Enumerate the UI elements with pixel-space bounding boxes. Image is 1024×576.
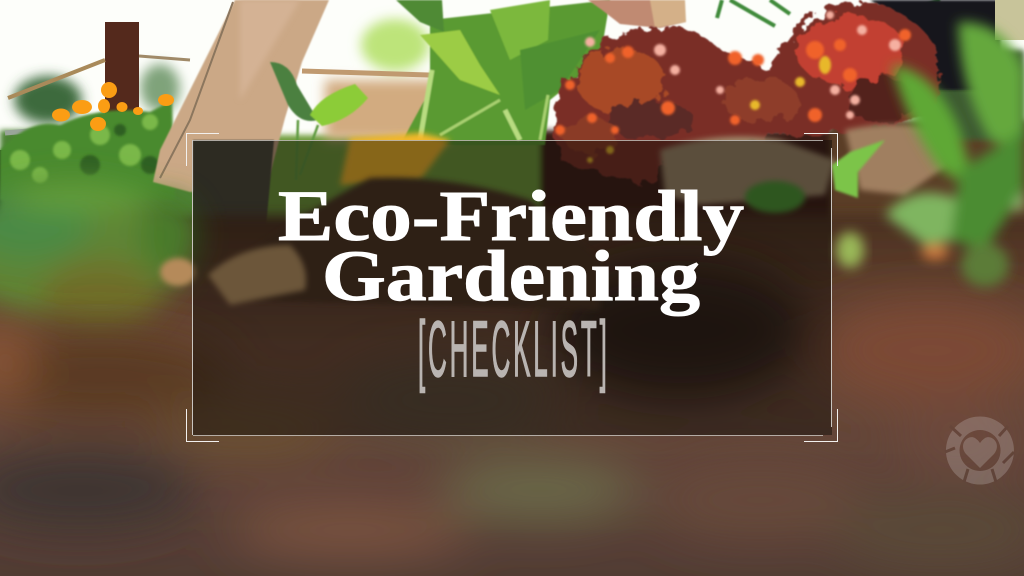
left foreground: blurred green foliage — [0, 180, 200, 331]
tall plants behind — [340, 0, 610, 185]
hand and grass at top — [588, 0, 968, 36]
sky — [0, 0, 1024, 150]
mid-height backdrop band — [0, 50, 1024, 230]
title: Eco-Friendly — [278, 176, 744, 256]
distant trees — [14, 19, 450, 140]
right foreground: blurred leaves — [885, 22, 1024, 287]
fence post and rope — [5, 22, 460, 133]
title — [278, 176, 744, 316]
panel: dark translucent title box — [193, 140, 832, 435]
soil base — [0, 215, 1024, 576]
icon: watermark logo with heart — [945, 416, 1014, 484]
title: Gardening — [322, 236, 700, 316]
subtitle: checklist: [CHECKLIST] — [418, 306, 610, 393]
flower bush — [0, 82, 175, 200]
foreground soil texture — [0, 260, 1024, 570]
panel border lines — [192, 140, 832, 436]
soil mounds and rocks — [160, 124, 948, 310]
lettuce heads — [552, 3, 941, 185]
corner brackets — [186, 134, 838, 442]
gardener trousers — [153, 0, 329, 270]
marigold flowers — [52, 82, 174, 131]
dark background top right — [870, 0, 1000, 90]
leaf beside the trousers — [270, 62, 368, 180]
